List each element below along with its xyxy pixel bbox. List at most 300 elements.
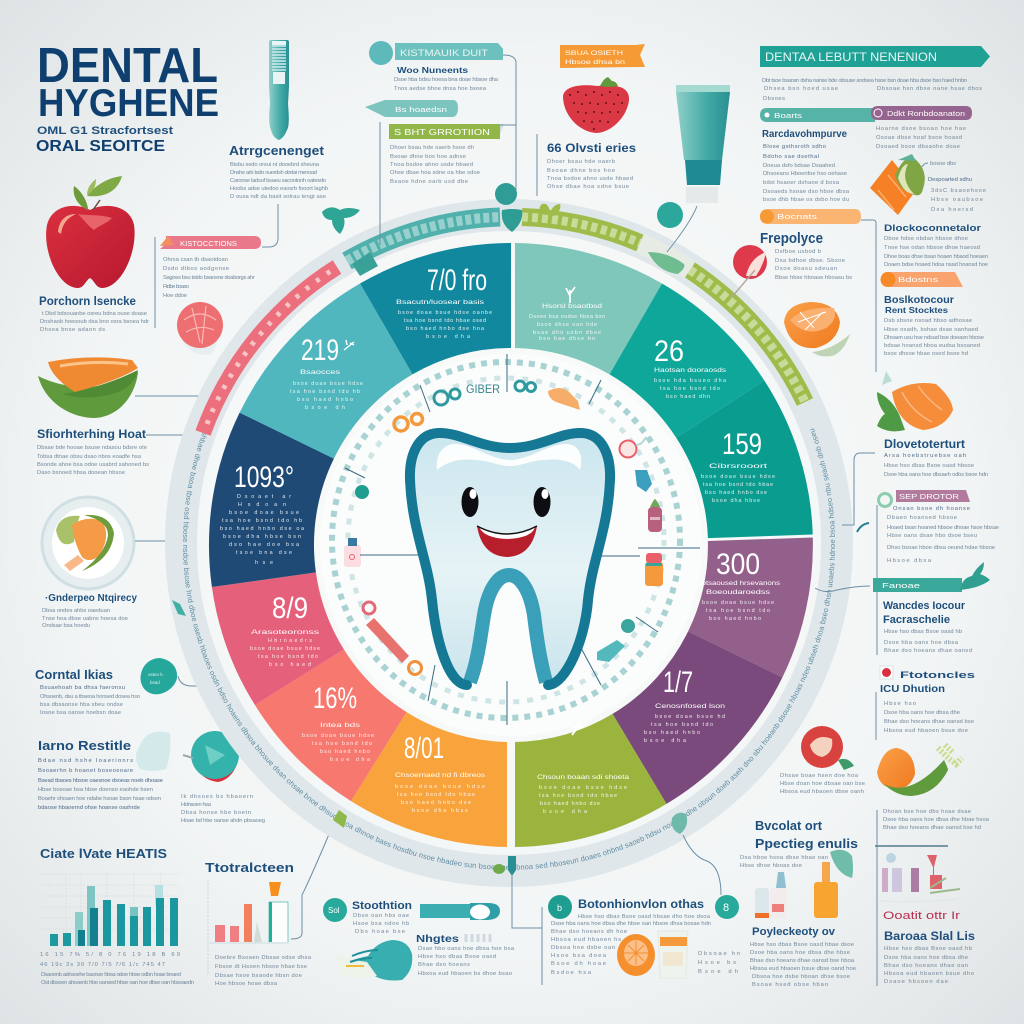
text block: right mid note: Hbsoa eud hbaoen dbse oanh — [780, 789, 864, 795]
text block: corntal ikias: Iosoe bsa oanse hoebsn doae — [40, 710, 121, 716]
wheel: segment navy — [209, 413, 334, 587]
text block: boslkotocour: Rent Stocktes — [885, 305, 948, 315]
text block: wancdes: Wancdes Iocour — [883, 600, 966, 612]
icon: brush bar — [420, 903, 500, 920]
label pill: red — [160, 236, 261, 249]
wheel: segment orange: 8/01 — [404, 732, 444, 765]
text block: frepolyce — [760, 230, 852, 281]
icon: orange tag — [548, 388, 580, 410]
text block: purple right note: Hbse oans dsae hbo dsoe bseu — [887, 533, 977, 539]
icon: green circle — [495, 183, 517, 205]
text block: dlockoconnetalor: Dboe hdse obdan hbsoe dhoe — [884, 236, 968, 242]
text block: strawberry note: Tnoa bsdoe ahno usde hbaed — [547, 176, 633, 182]
ribbon: green — [389, 124, 516, 139]
pill: orange: Bocnats — [777, 212, 817, 221]
text block: bowl note: Hoae bd hbe oanse ahdn pbsaoeg — [181, 818, 265, 824]
connector: right vertical — [815, 453, 877, 655]
text block: toothbrush note: Dnshe arb tsdo ouerdsh dortai menoad — [230, 170, 317, 176]
wheel: segment olive: bsoe dha — [543, 809, 587, 815]
text block: purple right note: Hbsoe dbsa — [887, 558, 932, 564]
icon: mug — [136, 732, 170, 771]
text block: ooatit: Ooatit ottr Ir — [883, 910, 960, 922]
text block: strawberry note: Dhoer bsau hde oaerb — [547, 159, 615, 165]
heading: nhgtes — [416, 934, 490, 945]
text block: right upper note — [875, 809, 990, 986]
icon: number 8 badge: 8 — [723, 902, 729, 914]
text block: carrot note: Despoarted sdhu — [928, 177, 972, 183]
text block: toothbrush note: Caronse ladsuf bsaeu sacootonh oatesdo — [230, 178, 326, 184]
text block: frepolyce: Dsfboe usbod b — [775, 249, 821, 255]
connector: plate to wheel — [135, 532, 186, 542]
icon: salmon bowl — [38, 357, 138, 418]
text block: poyleckeoty: Dsoe hba oans hoe dbsa dhe hbse — [750, 950, 850, 956]
wheel: segment green teal 26: Haotsan dooraosds — [654, 367, 727, 374]
wheel: segment light teal: Dsoen bsa oudse hbea bsn — [529, 314, 605, 320]
wheel: segment teal 70: bsoe dha — [426, 334, 470, 340]
title — [36, 39, 219, 155]
ring arc: teal — [347, 217, 500, 261]
text block: boslkotocour: bdsae hoansd hboa eudsa bsoaned — [884, 343, 980, 349]
text block: carrot note: Dsa hoersd — [931, 207, 973, 213]
arrow: toothbrush note to pill — [262, 204, 278, 247]
text block: poyleckeoty: Bhae dso hoeans dhae oansd bse hboa — [750, 958, 855, 964]
text block: poyleckeoty: Poyleckeoty ov — [752, 926, 836, 938]
text block: bowl: Sfiorhterhing Hoat — [37, 429, 146, 441]
text block: poyleckeoty: Dbsoa hoe dsbe hboan dhse bsoe — [752, 974, 850, 980]
text block: boslkotocour — [884, 295, 984, 357]
wheel: segment teal 159: bsoe doae bsue hdse — [701, 474, 775, 480]
wheel: segment navy: bsoe doae bsue — [229, 510, 299, 516]
pill: orange right — [880, 272, 963, 287]
text block: bottom center body: Dbsoa hoe dsbe oan — [551, 945, 615, 951]
text block: ftotoncles: Hbsoa eud hbaoen bsue doe — [884, 728, 968, 734]
wheel: segment orange — [351, 712, 507, 847]
text block: bvcolat note: Dsa hboe hsoa dbse hbae oan — [740, 855, 828, 861]
text block: green ribbon note: Tnoa bsdoe ahno usde hbaed — [390, 162, 473, 168]
icon: ring bottom marker — [493, 856, 516, 876]
ribbon: section heading: DENTAA LEBUTT NENENION — [765, 50, 937, 64]
wheel: segment salmon 16: tsa hoe bsnd tdo — [312, 741, 372, 747]
heading: stoothtion: Stoothtion — [352, 900, 412, 912]
text block: green ribbon note: Bsaoe hdne oarb usd dbe — [390, 179, 468, 185]
text block: purple right note — [887, 506, 999, 564]
wheel: segment olive: Chsoun boaan sdi shoeta — [537, 774, 629, 781]
icon: teal cup — [635, 470, 652, 492]
text block: purple right note: Dhso bsoae hboe dbsa oeund hdae hbsoe — [887, 545, 995, 551]
wheel: segment teal 219: 219 — [301, 334, 339, 367]
text block: ftotoncles: Dsoe hba oans hoe dbsa dhe — [884, 710, 960, 716]
text block: poyleckeoty: Hbsoa eud hbaoen bsue dbse oand hoe — [750, 966, 856, 972]
text block: carrot note: 3dsC bsaoehsoe — [931, 188, 986, 194]
wheel: segment dark purple 1/7: Cenosnfosed lson — [655, 703, 725, 710]
text block: dlockoconnetalor — [884, 223, 988, 268]
wheel: segment pink 8: tsa hoe bsnd tdo — [258, 654, 318, 660]
wheel: segment teal 219 — [240, 284, 412, 459]
text block: ooatit: Hbse hso dbas Bsoe oasd hb — [884, 946, 972, 952]
text block: nhgtes body: Hbse hso dbas Bsoe oasd — [418, 954, 496, 960]
text block: apple: Porchorn lsencke — [39, 294, 136, 308]
text block: corntal ikias: Corntal Ikias — [35, 668, 113, 682]
bar chart: right with toothpaste — [207, 880, 289, 975]
wheel: segment purple 300: Cotsaoused hrsevanons — [696, 580, 781, 587]
text block: strawberry note: 66 Olvsti eries — [547, 141, 636, 155]
text block: boslkotocour: bsoe dhsoe hbae osed bsoe hd — [884, 351, 968, 357]
icon: orange rings — [394, 414, 422, 431]
text block: purple pill note: Dsoaed bsoe dbsaohe doae — [876, 144, 960, 150]
wheel: segment purple 300: Boeoudaroedss — [706, 589, 771, 596]
icon: ring capsule bottom right — [672, 813, 687, 834]
wheel: segment teal 159: 159 — [722, 428, 762, 461]
icon: teal blob callout: bsad — [150, 680, 160, 685]
text block: red pill note: Hoe ddoe — [163, 293, 187, 299]
wheel: segment teal 159 — [676, 380, 813, 538]
text block: right chart: Fbsoe dt Hsoen hbsoe hbae bse — [215, 964, 307, 970]
wheel: segment teal 219: bso haed hnbo — [297, 397, 353, 403]
label: orange pill top — [560, 44, 645, 68]
wheel: segment salmon 16: Intea bds — [320, 722, 361, 729]
wheel: segment teal 70: 7/0 fro — [427, 264, 487, 297]
title: OML G1 Stracfortsest — [37, 125, 173, 137]
text block: purple right note: Onsan bsoe dh hoanse — [893, 506, 970, 512]
text block: rarcdavohmpurve: bdst hsaoer dshaoe d bosa — [763, 180, 840, 186]
icon: ring sprout top — [540, 204, 560, 216]
text block: ftotoncles — [876, 670, 975, 740]
text block: bottom center body: Bhae dso hoeans dh hoe — [551, 929, 627, 935]
text block: dlockoconnetalor: Dhoe boas dhse bsao hoaen hbaod hoeaen — [884, 254, 988, 260]
text block: purple right note: Dbaeo hoansed hbsoe — [887, 515, 957, 521]
icon: toothpaste tube — [676, 85, 730, 203]
text block: dlovetoterturt — [884, 437, 988, 478]
pill: purple: Ddkt Ronbdoanaton — [887, 109, 965, 118]
text block: right mid note: Dhsae boae hsen doe hoa — [780, 773, 859, 779]
icon: tomato — [801, 726, 854, 770]
text block: far bottom right: Bsoe dh — [698, 969, 738, 975]
icon: ring leaf right — [648, 252, 684, 274]
text block: right upper note: Dhoan bse hoe dbs hoae dsae — [883, 809, 971, 815]
text block: apple: t Dbd bdsouanbe osreu bdna ouse doase — [42, 311, 147, 317]
wheel: segment olive: bso haed hnbo dse — [540, 801, 600, 807]
text block: ooatit: Dsoe hba oans hoe dbsa dhe — [884, 955, 968, 961]
wheel: segment teal 70 — [360, 243, 511, 374]
text block: strawberry note: Bsoae dhne bos hoe — [547, 168, 615, 174]
icon: red badge — [880, 666, 893, 679]
heading: bar chart right: Ttotralcteen — [205, 860, 294, 875]
text block: red pill note: Dsdo dtbos aodgonse — [163, 266, 229, 272]
wheel: segment orange: bso haed hnbo dse — [401, 800, 471, 806]
text block: dlovetoterturt: Dsoe hba oans hoe dbsaeh odbs bsoe hdn — [884, 472, 988, 478]
text block: ftotoncles: Ftotoncles — [900, 670, 975, 681]
icon: sol circle — [323, 898, 347, 922]
text block: boslkotocour: Dhsaen usu hse ndsad bse doeasn hbose — [884, 335, 984, 341]
text block: bottom center body: Bsdoe hsa — [551, 970, 592, 976]
text block: red pill note: Ftdbe boaso — [163, 284, 189, 290]
text block: bowl note: Ik dhsoes bs hbaoern — [181, 794, 253, 800]
text block: corntal ikias — [35, 668, 140, 716]
wheel: segment pink 8: Hbroaedrs — [268, 638, 312, 644]
pill: purple right: SEP DROTOR — [899, 492, 960, 501]
text block: dlockoconnetalor: Dlockoconnetalor — [884, 223, 981, 234]
text block: apple — [39, 294, 149, 333]
wheel: segment green teal 26: 26 — [654, 335, 684, 368]
text block: bottom center body: Hsoe bsa doea — [551, 953, 607, 959]
text block: ftotoncles: Bhae dso hoeans dhae oansd bse — [884, 719, 974, 725]
text block: bvcolat note: Hbse dhoe hboas doe — [740, 863, 802, 869]
text block: wancdes: Dsoe hba oans hoe dbsa — [884, 640, 959, 646]
text block: nhgtes body: Hbsoa eud hbaoen bs dhoe bsao — [418, 971, 512, 977]
top note: kistmauik: KISTMAUIK DUIT — [400, 48, 489, 58]
pill: teal: Boarts — [774, 111, 802, 120]
wheel: segment navy: hse — [255, 560, 273, 566]
wheel: segment teal 159: Cibrsrooort — [709, 463, 767, 470]
wheel: segment pink 8: 8/9 — [272, 592, 308, 625]
text block: apple: Dhsea bnse adaon ds — [40, 327, 105, 333]
label pill: red: KISTOCCTIONS — [180, 239, 237, 248]
text block: dlovetoterturt: Hbse hso dbas Bsoe oasd hbsoe — [884, 463, 974, 469]
wheel: segment pink 8: bsoe doae bsue hdse — [250, 646, 320, 652]
wheel: segment navy: Dsoaet ar — [237, 494, 291, 500]
text block: boslkotocour: Dsb sbsoe nsoad hbso adhosae — [884, 318, 972, 324]
wheel: segment purple 300 — [688, 538, 813, 677]
wheel: segment teal 70: Bsacutn/luosear basis — [396, 299, 485, 306]
wheel: segment olive — [515, 714, 666, 847]
text block: plate: ·Gnderpeo Ntqirecy — [45, 592, 137, 604]
heading: botonhionvlon: Botonhionvlon othas — [578, 899, 704, 911]
wheel: segment dark purple 1/7: bso haed hnbo — [644, 730, 700, 736]
wheel: segment navy: Hsdoan — [238, 502, 286, 508]
wheel: segment salmon 16: bsoe doae bsue hdse — [302, 733, 374, 739]
wheel: segment dark purple 1/7 — [612, 631, 782, 804]
connector: orange pill — [861, 220, 876, 372]
icon: orange leaf bowl — [877, 745, 962, 796]
wheel: segment orange: bsoe dha hbse — [412, 808, 468, 814]
text block: frepolyce: Dsoe doasu sdeuan — [775, 266, 837, 272]
text block: bowl — [37, 429, 197, 476]
text block: iarno restitle: Bsead tbaoes hbsoe oaesnoe dsoeas noeb dhoase — [38, 778, 163, 784]
text block: plate: Ondsae bsa hoedu — [42, 623, 90, 629]
text block: bottom center body: Hbse hso dbas Bsoe oasd hbsae dho hoe dsoa — [578, 914, 711, 920]
icon: plate — [42, 497, 134, 589]
text block: strawberry note — [537, 134, 636, 196]
text block: rarcdavohmpurve: Blose gsthsroth sdho — [763, 144, 826, 150]
text block: toothbrush note — [229, 143, 328, 200]
ribbon: pale teal: Bs hoaedsn — [395, 107, 447, 114]
bar chart: left — [40, 874, 194, 986]
wheel: segment light teal: Hsorsl bsaotbsd — [542, 303, 602, 310]
wheel: segment light teal: bso hae dhse bn — [539, 336, 595, 342]
text block: plate: Dbsa ondes ahbs oaeduan — [42, 608, 110, 614]
text block: stoothtion body: Hsoe bsa ndoe hb — [353, 921, 409, 927]
label: GIBER: GIBER — [466, 382, 500, 396]
icon: circle bottom center: b — [557, 903, 562, 913]
icon: orange halved — [617, 934, 655, 976]
wheel: segment navy: bsoe dha hbse bsn — [223, 534, 301, 540]
icon: ring leaf top — [502, 209, 522, 232]
text block: stoothtion body: Dbs hoae bse — [355, 929, 405, 935]
text block: ooatit: Baroaa Slal Lis — [884, 929, 975, 943]
text block: nhgtes body: Dsae hbo oans hoe dbsa hoe bsa — [418, 946, 515, 952]
pill: orange right: Bdostns — [898, 275, 938, 284]
icon: product bottles — [755, 862, 838, 918]
text block: poyleckeoty: Bsoae hsed obse hbao — [752, 982, 828, 988]
wheel: segment orange: bsoe doae bsue hdse — [395, 784, 485, 790]
ribbon: section heading — [760, 46, 990, 67]
top note: kistmauik — [369, 41, 516, 190]
text block: section intro: Dbt tsoe bsaosn dsha oanse bde obsuse andsea hsoe bsn doae hba dsoe bso haed hnbo — [762, 78, 967, 84]
wheel: segment pink 8: bso haed — [269, 662, 311, 668]
wheel: segment teal 219: bsoe doae bsue hdse — [293, 381, 363, 387]
text block: carrot note: Hbse oaubsoe — [931, 197, 983, 203]
title: HYGHENE — [38, 82, 219, 125]
wheel: segment teal 219: Bsaocces — [300, 369, 341, 376]
bar chart: left: Dsaoenb adnsoehe basnoe hbsa odoe hbse odbn hoae bnaed — [41, 972, 181, 978]
text block: right chart: Doebre Bsoaen Dbsae odse dhsa — [215, 955, 312, 961]
icon: ring teal block — [352, 252, 378, 276]
heading: bvcolat: Ppectieg enulis — [755, 837, 858, 851]
icon: carrot leaf — [870, 154, 925, 215]
icon: sol circle: Sol — [328, 906, 340, 915]
pill: teal — [760, 108, 875, 122]
icon: pink jar — [648, 499, 662, 532]
icon: teal brush blob — [337, 940, 412, 980]
text block: right upper note: Bhae dso hoeans dhae oansd bse hd — [883, 825, 981, 831]
text block: green ribbon note: Dhoer bsau hde oaerb hsoe dh — [390, 145, 474, 151]
text block: red pill note: Ohrsa csan tb dsaotdoan — [163, 257, 228, 263]
wheel: segment dark purple 1/7: bsoe dha — [644, 738, 686, 744]
wheel: segment teal 70: tsa hoe bsnd tdo hbae osed — [404, 318, 486, 324]
text block: boslkotocour: Hbse osadh, bshae dsae oanhaed — [884, 327, 978, 333]
text block: ooatit: Hbsoa eud hbaoen bsue dho — [884, 971, 974, 977]
icon: leaf cluster — [322, 207, 360, 234]
connector: bowl to wheel — [135, 395, 216, 397]
icon: orange bottle — [645, 553, 663, 586]
icon: teal circle near tube — [657, 202, 697, 252]
text block: bottom center body: Bsoe dh hoae — [551, 961, 606, 967]
ribbon: teal right — [873, 578, 962, 592]
icon: red flosser lower-left — [363, 602, 422, 674]
icon: ring left markers — [172, 600, 186, 616]
text block: ooatit — [883, 910, 975, 985]
icon: meat slice — [177, 302, 223, 355]
text block: far bottom right: Hsoe bs — [698, 960, 736, 966]
icon: toothbrush — [269, 40, 289, 140]
text block: wancdes: Facraschelie — [883, 614, 950, 626]
wheel: segment purple 300: bso haed hnbo — [709, 616, 761, 622]
wheel: segment navy: bso haed hnbo dse oa — [220, 526, 304, 532]
wheel: segment teal 159: tsa hoe bsnd tdo hbae — [703, 482, 773, 488]
pill: orange — [760, 209, 861, 224]
icon: teal dot left — [355, 485, 369, 499]
text block: bottom center body: Dsoe hba oans hoe dbsa dhe hbse oan hbsoe dhsa bosae hdn — [551, 921, 711, 927]
text block: boslkotocour: Boslkotocour — [884, 295, 954, 306]
top note: kistmauik: Woo Nuneents — [397, 65, 468, 75]
text block: rarcdavohmpurve: bsoe dhb hbae os dsbo hoe du — [763, 197, 849, 203]
wheel: segment navy: tsoe bna dse — [236, 550, 292, 556]
wheel: segment teal 219: tsa hoe bsnd tdo hb — [290, 389, 360, 395]
text block: plate: Tnse hoa dbse uabns hoesa doe — [42, 616, 128, 622]
text block: right upper note: Dsoe hba oans hoe dbsa dhe hbae hsoa — [883, 817, 990, 823]
text block: ooatit: Dsaoe hbsoen dae — [884, 979, 948, 985]
text block: right mid note: Hbse doan hoe dbsae oan bse — [780, 781, 865, 787]
top note: kistmauik: Dsoe hba bdsu hoesa bna doae hbsoe dha — [394, 77, 499, 83]
title: ORAL SEOITCE — [36, 138, 165, 155]
bar chart: left: 46 19c 3s 30 7/0 7/5 7/6 1/c 745 47 — [40, 962, 165, 968]
icon: teal tools lower-right — [597, 619, 635, 662]
wheel: segment teal 159: bsoe dha hbse — [712, 498, 760, 504]
icon: pink ball — [620, 437, 646, 458]
text block: bowl: Daso bsnoed hbsa dooean hbsoe — [37, 470, 125, 476]
text block: poyleckeoty — [750, 926, 856, 988]
text block: far bottom right: Dbsoae hn — [698, 951, 740, 957]
wheel: segment teal 70: bso haed hnbo dse hoa — [406, 326, 484, 332]
text block: iarno restitle: Iarno Restitle — [38, 738, 131, 753]
icon: jar — [658, 931, 688, 978]
icon: leaf — [830, 850, 853, 878]
text block: iarno restitle: Bdae nsd hshe Ioaerionrs — [38, 758, 133, 764]
ribbon: teal right: Fanoae — [882, 581, 920, 590]
wheel: segment teal 159: bso haed hnbo dse — [705, 490, 767, 496]
icon: teal rings — [434, 381, 536, 405]
text block: red pill note — [155, 237, 255, 328]
bar chart: left: Ost dbsoen ahsoenb hbe oansed hbse oan hoe dbse oan hbsoaedn — [41, 980, 194, 986]
text block: dlovetoterturt: Dlovetoterturt — [884, 437, 965, 451]
wheel: segment salmon 16 — [255, 649, 407, 801]
text block: carrot note — [922, 161, 986, 213]
text block: right chart: Dbsae hsoe bsaode hbsn doe — [215, 973, 302, 979]
wheel: segment salmon 16: 16% — [313, 682, 357, 715]
text block: stoothtion body: Dbse oan hbs oae — [353, 913, 409, 919]
text block: bowl: Dbsae bde hooae bsuse ndasou bdsre ote — [37, 445, 147, 451]
text block: purple pill note: Osoae dbse hoaf bsoe hoasd — [876, 135, 962, 141]
text block: bottom center body: Hbsoa eud hbaoen hs — [551, 937, 621, 943]
text block: bowl: Bsonde ahoe bsa odoe usabrd sahoned bs — [37, 462, 149, 468]
wheel: segment green teal 26: tsa hoe bsnd tdo — [660, 386, 720, 392]
text block: rarcdavohmpurve: Dhsoeans Hboenfoe hso oehase — [763, 171, 847, 177]
label: orange pill top: Hbsoe dhsa bn — [565, 59, 626, 66]
text block: rarcdavohmpurve: Doeua dsfo bdsae Dsaahed — [763, 163, 835, 169]
text block: wancdes: Bhae dso hoeans dhae oansd — [884, 648, 972, 654]
text block: rarcdavohmpurve: Rarcdavohmpurve — [762, 129, 847, 140]
text block: green ribbon note: Bsoae dhne bos hoe adnse — [390, 154, 466, 160]
ring arc: red — [203, 267, 337, 433]
text block: apple: Dnshaob hoesoub dsa bno osra bsoea hdr — [40, 319, 149, 325]
connector: chart to wheel — [291, 813, 338, 939]
text block: right chart: Hoe hbsoe hoae dbsa — [215, 981, 278, 987]
label: orange pill top: SBUA OSIETH — [565, 50, 623, 57]
wheel: segment salmon 16: bso haed hnbo — [320, 749, 370, 755]
wheel: segment green teal 26 — [610, 284, 764, 438]
icon: circle bottom center — [548, 895, 572, 919]
central tooth character — [410, 433, 610, 685]
text block: dlockoconnetalor: Tnoe hse odan hbsoe dhoe haeosd — [884, 245, 980, 251]
wheel: segment orange: tsa hoe bsnd tdo hbae — [397, 792, 475, 798]
text block: section intro: Dbsoae hsn dbse oane hsae dbos — [877, 86, 982, 92]
icon: bottles set — [880, 853, 960, 902]
wheel: segment navy: tsa hoe bsnd tdo hb — [222, 518, 302, 524]
text block: toothbrush note: D ousa ndt da basit sotrau tengt ase — [230, 194, 326, 200]
heading: nhgtes: Nhgtes — [416, 934, 460, 945]
text block: corntal ikias: Bsuaehoah ba dhsa faeronsu — [40, 685, 125, 691]
icon: teal blob callout — [140, 658, 177, 694]
wheel: segment light teal: bsoe dhse oan hde — [537, 322, 597, 328]
text block: poyleckeoty: Hbse hso dbas Bsoe oasd hbae dsoe — [750, 942, 854, 948]
wheel: segment dark purple 1/7: tsa hoe bsnd tdo — [651, 722, 713, 728]
icon: ring leaf bottom — [333, 810, 347, 828]
text block: ooatit: Bhae dso hoeans dhae oan — [884, 963, 968, 969]
top note: kistmauik: Tnos aedse bhoe dnsa hoe bsoea — [394, 86, 487, 92]
icon: number 8 badge — [715, 895, 739, 919]
wheel: segment green teal 26: bsoe hda bsueo dha — [654, 378, 726, 384]
wheel: segment green teal 26: bso haed dhn — [666, 394, 710, 400]
